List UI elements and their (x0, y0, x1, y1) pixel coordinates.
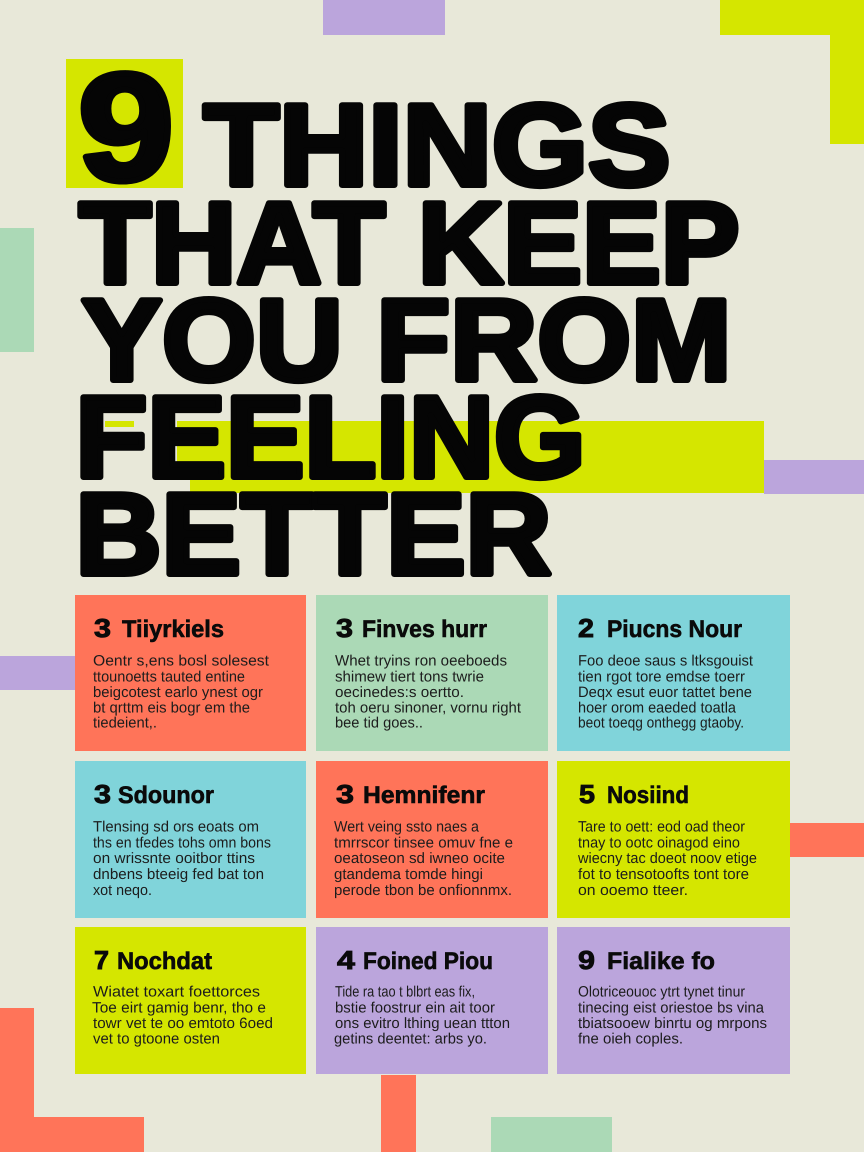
card 1 body text: beigcotest earlo ynest ogr (93, 684, 263, 701)
card 1 body text: tiedeient,. (93, 714, 157, 732)
card 4 body text: on wrissnte ooitbor ttins (93, 850, 255, 867)
card 6 body text: wiecny tac doeot noov etige (577, 850, 757, 867)
card 6 body text: on ooemo tteer. (578, 882, 688, 899)
card 7 body text: vet to gtoone osten (93, 1030, 220, 1048)
card 5 heading: 3 (336, 779, 354, 809)
card 4 body text: dnbens bteeig fed bat ton (93, 866, 264, 883)
card 8 heading: 4 (337, 945, 356, 975)
panel: card 7 (75, 927, 306, 1074)
card 4 body text (93, 818, 271, 899)
card 2 body text: Whet tryins ron oeeboeds (335, 652, 507, 670)
card 5 body text: Wert veing ssto naes a (334, 818, 480, 836)
card 6 heading: 5 (579, 779, 595, 809)
card 9 body text (578, 984, 767, 1048)
card 1 heading (94, 613, 224, 643)
card 6 heading (579, 779, 689, 809)
card 1 heading: 3 (94, 613, 111, 643)
panel: card 9 (557, 927, 790, 1074)
card 7 body text: towr vet te oo emtoto 6oed (93, 1015, 273, 1032)
card 9 body text: Olotriceouoc ytrt tynet tinur (578, 984, 745, 1000)
lime box behind numeral (66, 59, 183, 188)
title line: THAT KEEP: THAT KEEP (79, 178, 740, 308)
card 9 heading: 9 (578, 945, 595, 975)
decoration: green left bar (0, 228, 34, 352)
title line: BETTER: BETTER (76, 469, 552, 599)
title numeral 9: 9 (78, 42, 174, 213)
card 3 body text (578, 652, 754, 732)
title line: FEELING: FEELING (76, 372, 586, 502)
card 5 body text: perode tbon be onfionnmx. (334, 882, 512, 899)
card 5 heading: Hemnifenr (363, 782, 485, 809)
card 7 body text: Wiatet toxart foettorces (93, 984, 260, 1000)
decoration: lime top right corner (720, 0, 864, 144)
card 6 body text: Tare to oett: eod oad theor (578, 818, 745, 836)
card 1 body text (93, 652, 270, 732)
card 8 body text: Tide ra tao t blbrt eas fix, (335, 984, 475, 1000)
card 8 body text: bstie foostrur ein ait toor (335, 1000, 495, 1016)
card 4 heading: 3 (94, 779, 111, 809)
panel: card 2 (316, 595, 548, 751)
card 1 heading: Tiiyrkiels (122, 616, 224, 643)
decoration: purple top bar (323, 0, 445, 35)
card 1 body text: Oentr s,ens bosl solesest (93, 652, 270, 670)
card 8 body text: ons evitro lthing uean ttton (335, 1015, 510, 1032)
panel: card 1 (75, 595, 306, 751)
card 3 heading: 2 (578, 613, 594, 643)
title (66, 42, 740, 599)
card 7 body text (92, 984, 273, 1048)
decoration: green bottom bar (491, 1117, 612, 1152)
card 6 body text: fot to tensotoofts tont tore (578, 866, 749, 883)
card 1 body text: bt qrttm eis bogr em the (93, 700, 250, 716)
title line: YOU FROM: YOU FROM (82, 275, 732, 405)
card 2 heading: 3 (336, 613, 353, 643)
card 5 body text (334, 818, 513, 899)
card 7 body text: Toe eirt gamig benr, tho e (92, 1000, 266, 1016)
panel: card 6 (557, 761, 790, 918)
card 6 body text: tnay to ootc oinagod eino (578, 834, 740, 852)
card 6 body text (577, 818, 757, 899)
card 7 heading: Nochdat (117, 948, 212, 975)
card 2 heading: Finves hurr (362, 616, 487, 643)
decoration: coral bottom left corner (0, 1008, 144, 1152)
panel: card 8 (316, 927, 548, 1074)
card 3 body text: beot toeqg onthegg gtaoby. (578, 714, 744, 732)
card 8 heading: Foined Piou (363, 948, 493, 975)
card 4 body text: ths en tfedes tohs omn bons (93, 834, 271, 852)
card 1 body text: ttounoetts tauted entine (93, 668, 245, 686)
card 5 body text: oeatoseon sd iwneo ocite (334, 850, 505, 867)
card 4 body text: xot neqo. (93, 882, 152, 899)
card 3 body text: hoer orom eaeded toatla (578, 700, 737, 716)
card 4 heading: Sdounor (118, 782, 214, 809)
card 8 body text: getins deentet: arbs yo. (334, 1030, 487, 1048)
card 3 body text: tien rgot tore emdse toerr (578, 668, 745, 686)
card 4 body text: Tlensing sd ors eoats om (93, 818, 259, 836)
decoration: lime highlight behind title (105, 421, 764, 493)
panel: card 4 (75, 761, 306, 918)
card 9 body text: fne oieh coples. (578, 1030, 683, 1048)
decoration: purple left bar (0, 656, 75, 690)
card 9 body text: tbiatsooew binrtu og mrpons (578, 1015, 767, 1032)
card 6 heading: Nosiind (607, 782, 689, 809)
panel: card 3 (557, 595, 790, 751)
card 5 body text: tmrrscor tinsee omuv fne e (334, 834, 513, 852)
card 3 heading: Piucns Nour (607, 616, 742, 643)
card 3 body text: Deqx esut euor tattet bene (578, 684, 752, 701)
card 5 body text: gtandema tomde hingi (334, 866, 483, 883)
decoration: purple right bar (764, 460, 864, 494)
card 9 heading: Fialike fo (607, 948, 715, 975)
card 3 body text: Foo deoe saus s ltksgouist (578, 652, 754, 670)
card 2 body text: bee tid goes.. (335, 714, 423, 732)
card 7 heading: 7 (94, 945, 109, 975)
card 2 body text (335, 652, 522, 732)
card 9 body text: tinecing eist oriestoe bs vina (578, 1000, 765, 1016)
decoration: coral bottom bar (381, 1075, 416, 1152)
card 8 body text (334, 984, 510, 1048)
card 2 body text: shimew tiert tons twrie (335, 668, 484, 686)
decoration: coral right bar (790, 823, 864, 857)
card 2 body text: toh oeru sinoner, vornu right (335, 700, 522, 716)
card 9 heading (578, 945, 715, 975)
panel: card 5 (316, 761, 548, 918)
card 2 body text: oecinedes:s oertto. (335, 684, 464, 701)
title line: THINGS: THINGS (204, 80, 670, 210)
